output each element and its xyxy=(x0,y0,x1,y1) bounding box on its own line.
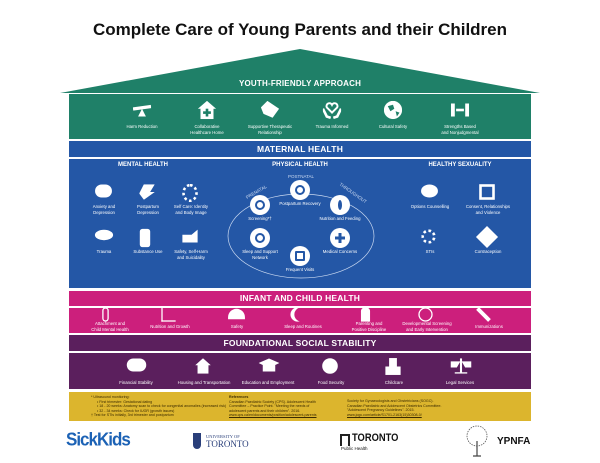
panel: maternal health: Postpartum Recovery xyxy=(279,201,321,206)
roof xyxy=(60,49,540,93)
panel: footnotes and references: † Test for STIs initially, 3rd trimester and postpartum xyxy=(91,413,174,417)
panel: foundational social stability: Education and Employment xyxy=(242,380,294,385)
panel: maternal health xyxy=(69,159,531,288)
panel: footnotes and references xyxy=(69,392,531,421)
panel: youth-friendly: Relationship xyxy=(258,130,282,134)
panel: foundational social stability: Financial Stability xyxy=(119,380,153,385)
panel: footnotes and references: "Adolescent Pregnancy Guidelines". 2015. xyxy=(347,408,414,412)
panel: maternal health: Contraception xyxy=(475,249,501,254)
icon: dumbbell xyxy=(451,104,469,116)
panel: infant and child health: Nutrition and Growth xyxy=(150,324,190,329)
mental health icons xyxy=(95,184,112,198)
panel: youth-friendly: Healthcare Home xyxy=(190,130,224,134)
panel: maternal health: and Suicidality xyxy=(177,254,205,260)
heading: maternal health xyxy=(69,141,531,157)
heading: maternal health: MATERNAL HEALTH xyxy=(257,144,343,154)
logo: YPNFA: YPNFA xyxy=(497,436,530,447)
panel: infant and child health: Immunizations xyxy=(475,324,503,329)
logo: SickKids: SickKids xyxy=(66,429,130,450)
panel: foundational social stability: Childcare xyxy=(385,380,403,385)
panel: maternal health: Self Care: Identity xyxy=(174,204,208,209)
healthy sexuality icons xyxy=(421,184,438,198)
panel: maternal health: Network xyxy=(252,254,268,260)
heading: youth-friendly approach: YOUTH-FRIENDLY APPROACH xyxy=(239,79,361,88)
panel: youth-friendly: Collaborative xyxy=(194,124,220,129)
panel: youth-friendly: Strengths Based xyxy=(444,124,476,129)
panel: footnotes and references: References xyxy=(229,395,248,399)
panel: maternal health: MENTAL HEALTH xyxy=(118,162,168,168)
panel: youth-friendly xyxy=(69,94,531,139)
panel: footnotes and references: • First trimester: Gestational dating xyxy=(97,400,152,404)
panel: foundational social stability: Food Security xyxy=(318,380,344,385)
heading: infant and child health: INFANT AND CHILD HEALTH xyxy=(240,293,360,303)
icon: healthcare home xyxy=(198,101,216,120)
logo: YPNFA xyxy=(466,426,530,457)
panel: youth-friendly: Supportive Therapeutic xyxy=(248,124,292,129)
logo: Toronto Public Health: Public Health xyxy=(341,446,368,451)
ellipse: prenatal/postnatal cycle: THROUGHOUT xyxy=(338,182,368,204)
logo: University of Toronto: TORONTO xyxy=(206,439,249,449)
panel: foundational social stability: Housing and Transportation xyxy=(178,380,230,385)
panel: maternal health: Screening*† xyxy=(248,216,272,221)
panel: maternal health: Consent, Relationships xyxy=(466,204,510,209)
panel: maternal health: Substance Use xyxy=(133,249,163,254)
panel: youth-friendly: Harm Reduction xyxy=(126,124,158,129)
panel: maternal health: Sleep and Support xyxy=(242,249,278,254)
panel: maternal health: Depression xyxy=(93,210,115,214)
icon: handshake xyxy=(261,101,279,118)
logo: University of Toronto xyxy=(193,433,249,449)
panel: infant and child health: Child Mental Health xyxy=(91,326,129,332)
panel: footnotes and references: www.cps.ca/en/documents/position/adolescent-parents xyxy=(229,413,316,417)
panel: maternal health: HEALTHY SEXUALITY xyxy=(428,162,492,168)
panel: foundational social stability xyxy=(69,353,531,389)
panel: maternal health: and Body Image xyxy=(175,210,207,214)
panel: maternal health: Anxiety and xyxy=(93,204,115,209)
panel: footnotes and references: Canadian Paediatric and Adolescent Obstetrics Committee. xyxy=(347,404,442,408)
icon: heart hands xyxy=(322,102,342,119)
panel: footnotes and references: Society for Gynaecologists and Obstetricians (SOGC). xyxy=(347,399,433,403)
title: Complete Care of Young Parents and their Children xyxy=(93,20,507,39)
panel: footnotes and references: • 32 - 34 weeks: Check for IUGR (growth issues) xyxy=(97,408,174,412)
panel: infant and child health: and Early Intervention xyxy=(406,326,448,332)
icon: harm reduction xyxy=(132,104,152,116)
panel: maternal health: Options Counselling xyxy=(411,204,449,209)
panel: youth-friendly: Cultural Safety xyxy=(379,124,407,129)
panel: footnotes and references: * Ultrasound monitoring: xyxy=(91,395,130,399)
panel: maternal health: Frequent Visits xyxy=(286,267,314,272)
heading: infant and child health xyxy=(69,291,531,306)
panel: footnotes and references: • 18 - 20 weeks: Anatomy scan to check for congenital anomalies (increased risk) xyxy=(97,404,226,408)
panel: maternal health: Nutrition and Feeding xyxy=(319,216,361,221)
panel: maternal health: Safety, Self-Harm xyxy=(174,249,208,254)
panel: youth-friendly: Trauma Informed xyxy=(316,124,348,129)
panel: infant and child health xyxy=(69,308,531,333)
logo: Toronto Public Health xyxy=(340,432,398,451)
panel: infant and child health: Attachment and xyxy=(95,321,125,326)
physical health circles xyxy=(290,180,310,200)
panel: infant and child health: Safety xyxy=(231,324,243,329)
ellipse: prenatal/postnatal cycle: PRENATAL xyxy=(245,184,268,200)
panel: maternal health: PHYSICAL HEALTH xyxy=(272,162,328,168)
heading: foundational social stability: FOUNDATIONAL SOCIAL STABILITY xyxy=(224,338,376,348)
panel: maternal health: and Violence xyxy=(476,210,500,214)
panel: maternal health: STIs xyxy=(426,249,434,254)
ellipse: prenatal/postnatal cycle: POSTNATAL xyxy=(288,174,315,179)
heading: foundational social stability xyxy=(69,335,531,351)
panel: footnotes and references: adolescent parents and their children". 2016. xyxy=(229,408,300,412)
panel: foundational social stability: Legal Services xyxy=(446,380,474,385)
panel: maternal health: Postpartum xyxy=(137,204,159,209)
logo: University of Toronto: UNIVERSITY OF xyxy=(206,434,240,439)
panel: infant and child health: Developmental Screening xyxy=(402,321,452,326)
panel: maternal health: Trauma xyxy=(97,249,111,254)
panel: footnotes and references: Committee – Practice Point. "Meeting the needs of xyxy=(229,404,309,408)
panel: footnotes and references: www.jogc.com/article/S1701-2163(15)30308-0/ xyxy=(347,412,422,416)
logo: Toronto Public Health: TORONTO xyxy=(352,432,398,444)
ellipse: prenatal/postnatal cycle xyxy=(228,174,374,278)
panel: youth-friendly: and Nonjudgmental xyxy=(441,130,479,134)
icon: globe xyxy=(384,100,402,120)
panel: footnotes and references: Canadian Paediatric Society (CPS). Adolescent Health xyxy=(229,400,316,404)
panel: infant and child health: Parenting and xyxy=(356,321,382,326)
panel: maternal health: Medical Concerns xyxy=(323,249,357,254)
panel: maternal health: Depression xyxy=(137,210,159,214)
panel: infant and child health: Sleep and Routines xyxy=(284,324,322,329)
panel: infant and child health: Positive Discipline xyxy=(352,326,386,332)
